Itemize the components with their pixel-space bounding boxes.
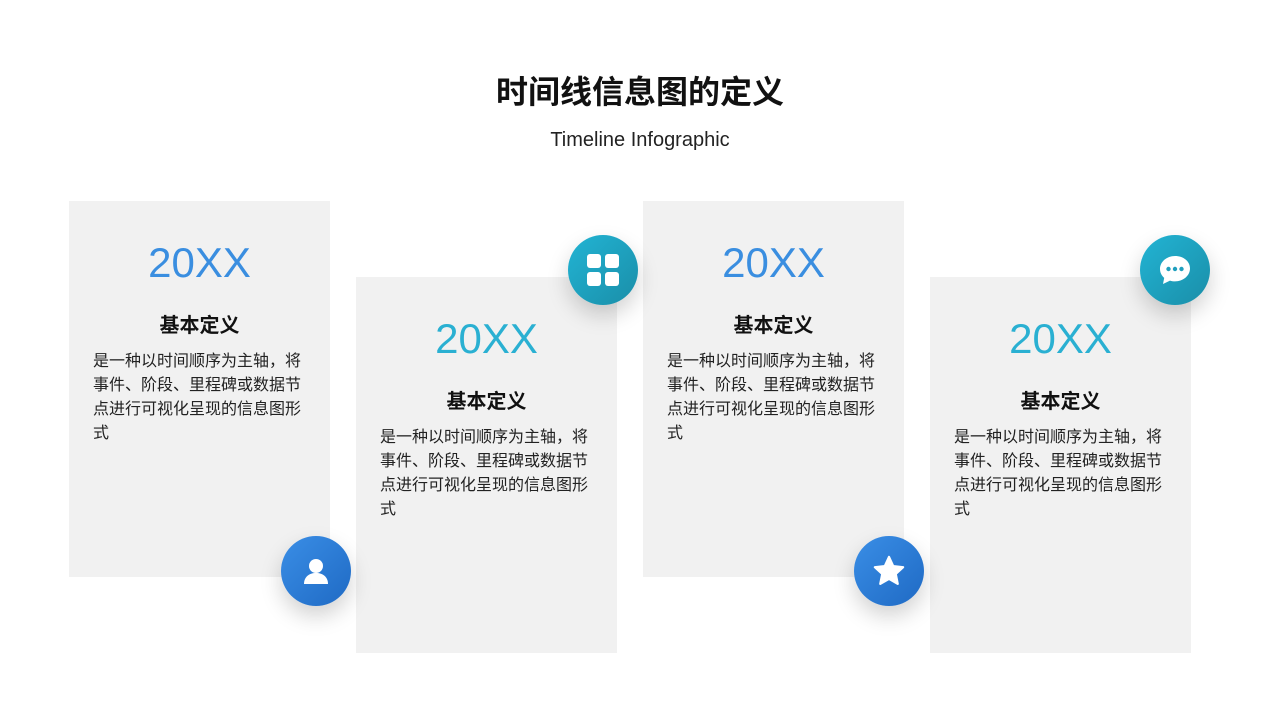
heading: 基本定义	[734, 315, 814, 337]
body text: 是一种以时间顺序为主轴，将事件、阶段、里程碑或数据节点进行可视化呈现的信息图形式	[93, 353, 301, 442]
body text: 是一种以时间顺序为主轴，将事件、阶段、里程碑或数据节点进行可视化呈现的信息图形式	[954, 429, 1162, 518]
panel: card 3	[643, 201, 904, 577]
icon: grid	[568, 235, 638, 305]
year: 20XX	[1009, 315, 1112, 362]
icon: star	[854, 536, 924, 606]
body text: 是一种以时间顺序为主轴，将事件、阶段、里程碑或数据节点进行可视化呈现的信息图形式	[380, 429, 588, 518]
title: 时间线信息图的定义	[496, 74, 784, 110]
heading: 基本定义	[160, 315, 240, 337]
year: 20XX	[435, 315, 538, 362]
icon: user	[281, 536, 351, 606]
year: 20XX	[148, 239, 251, 286]
icon: chat	[1140, 235, 1210, 305]
panel: card 1	[69, 201, 330, 577]
heading: 基本定义	[1020, 391, 1100, 413]
body text: 是一种以时间顺序为主轴，将事件、阶段、里程碑或数据节点进行可视化呈现的信息图形式	[667, 353, 875, 442]
panel: card 2	[356, 277, 617, 653]
panel: card 4	[930, 277, 1191, 653]
subtitle: Timeline Infographic	[550, 129, 730, 151]
year: 20XX	[722, 239, 825, 286]
heading: 基本定义	[446, 391, 526, 413]
